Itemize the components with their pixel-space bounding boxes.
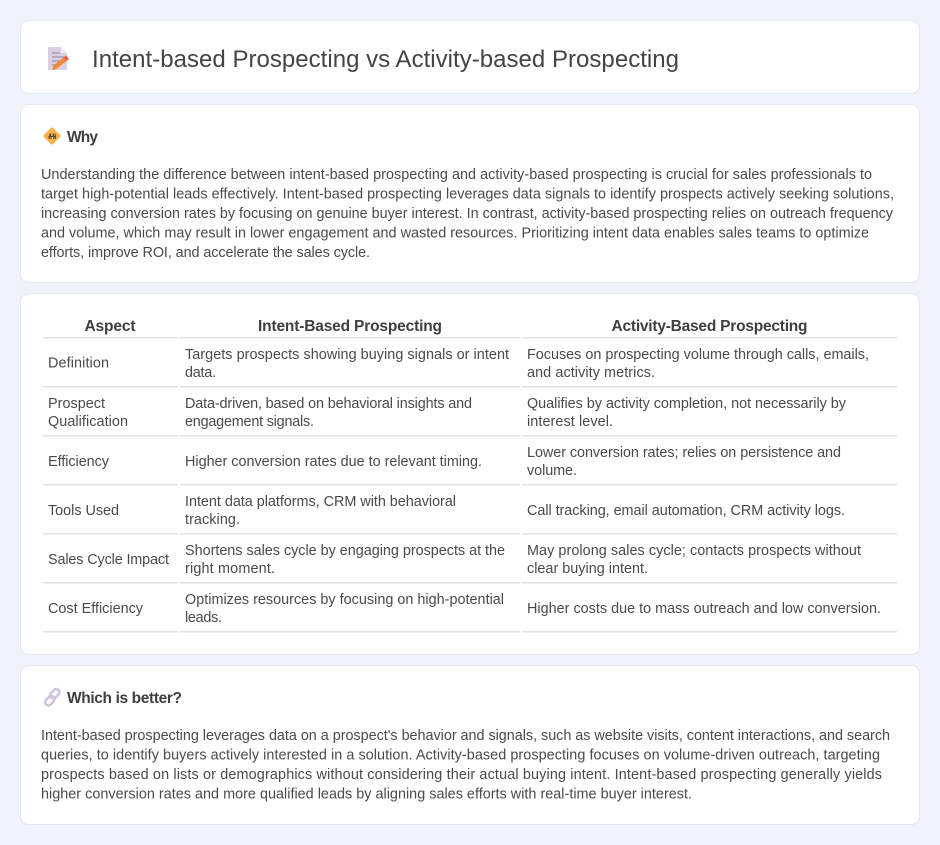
table header [43, 318, 897, 338]
text block: why: and volume, which may result in lower engagement and wasted resources. Prioritizing intent data enables sales teams to optimize [41, 226, 869, 242]
row: efficiency: volume. [527, 463, 577, 479]
row: sales cycle impact: Sales Cycle Impact [48, 552, 169, 568]
row: prospect qualification: Qualification [48, 414, 128, 430]
row: sales cycle impact: clear buying intent. [527, 561, 648, 577]
row: prospect qualification: Prospect [48, 396, 105, 412]
panel: why [20, 104, 920, 282]
text block: why: Understanding the difference between intent-based prospecting and activity-based prospecting is crucial for sales professionals to [41, 167, 872, 183]
row: cost efficiency: Higher costs due to mass outreach and low conversion. [527, 601, 881, 617]
row: tools used: tracking. [185, 512, 240, 528]
text block: why: target high-potential leads effectively. Intent-based prospecting leverages data signals to identify prospects actively seeking solutions, [41, 186, 894, 202]
text block: which is better: queries, to identify buyers actively interested in a solution. Activity-based prospecting focuses on volume-driven outreach, targeting [41, 748, 880, 764]
row: prospect qualification [43, 396, 897, 436]
row: sales cycle impact: May prolong sales cycle; contacts prospects without [527, 543, 861, 559]
row: tools used: Tools Used [48, 503, 119, 519]
row: efficiency: Higher conversion rates due to relevant timing. [185, 454, 482, 470]
row: definition: and activity metrics. [527, 365, 655, 381]
panel: comparison table [20, 294, 920, 654]
row: cost efficiency: Cost Efficiency [48, 601, 144, 617]
table header: Activity-Based Prospecting [612, 318, 808, 335]
heading: why: Why [67, 129, 98, 146]
row: definition: Focuses on prospecting volume through calls, emails, [527, 347, 869, 363]
row: definition: Targets prospects showing buying signals or intent [185, 347, 509, 363]
text block: why: efforts, improve ROI, and accelerate the sales cycle. [41, 245, 370, 261]
text block: which is better: higher conversion rates and more qualified leads by aligning sales efforts with real-time buyer interest. [41, 786, 692, 802]
row: cost efficiency: Optimizes resources by focusing on high-potential [185, 592, 504, 608]
text block: which is better [41, 728, 890, 802]
icon: diamond sign [43, 127, 61, 145]
text block: why: increasing conversion rates by focusing on genuine buyer interest. In contrast, activity-based prospecting relies on outreach frequency [41, 206, 894, 222]
row: definition: data. [185, 365, 216, 381]
row: efficiency [43, 445, 897, 486]
row: definition [43, 347, 897, 388]
row: cost efficiency: leads. [185, 610, 222, 626]
text block: which is better: prospects based on lists or demographics without considering their actual buying intent. Intent-based prospecting generally yields [41, 767, 882, 783]
row: tools used: Call tracking, email automation, CRM activity logs. [527, 503, 845, 519]
row: definition: Definition [48, 356, 109, 372]
row: prospect qualification: Data-driven, based on behavioral insights and [185, 396, 472, 412]
text block: which is better: Intent-based prospecting leverages data on a prospect's behavior and signals, such as website visits, content interactions, and search [41, 728, 890, 744]
row: prospect qualification: engagement signals. [185, 414, 314, 430]
row: sales cycle impact [43, 543, 897, 584]
row: efficiency: Efficiency [48, 454, 110, 470]
icon: link [44, 688, 61, 707]
row: sales cycle impact: Shortens sales cycle by engaging prospects at the [185, 543, 505, 559]
row: efficiency: Lower conversion rates; relies on persistence and [527, 445, 841, 461]
table header: Aspect [84, 318, 136, 335]
row: prospect qualification: Qualifies by activity completion, not necessarily by [527, 396, 847, 412]
text block: why [41, 167, 894, 261]
table header: Intent-Based Prospecting [258, 318, 442, 335]
row: cost efficiency [43, 592, 897, 632]
row: sales cycle impact: right moment. [185, 561, 275, 577]
panel: header [20, 20, 920, 94]
row: tools used [43, 494, 897, 534]
row: prospect qualification: interest level. [527, 414, 613, 430]
row: tools used: Intent data platforms, CRM with behavioral [185, 494, 456, 510]
icon: document with pencil [48, 47, 69, 70]
panel: which is better [20, 666, 920, 824]
heading: which is better: Which is better? [67, 690, 182, 707]
title: Intent-based Prospecting vs Activity-based Prospecting [92, 46, 679, 73]
